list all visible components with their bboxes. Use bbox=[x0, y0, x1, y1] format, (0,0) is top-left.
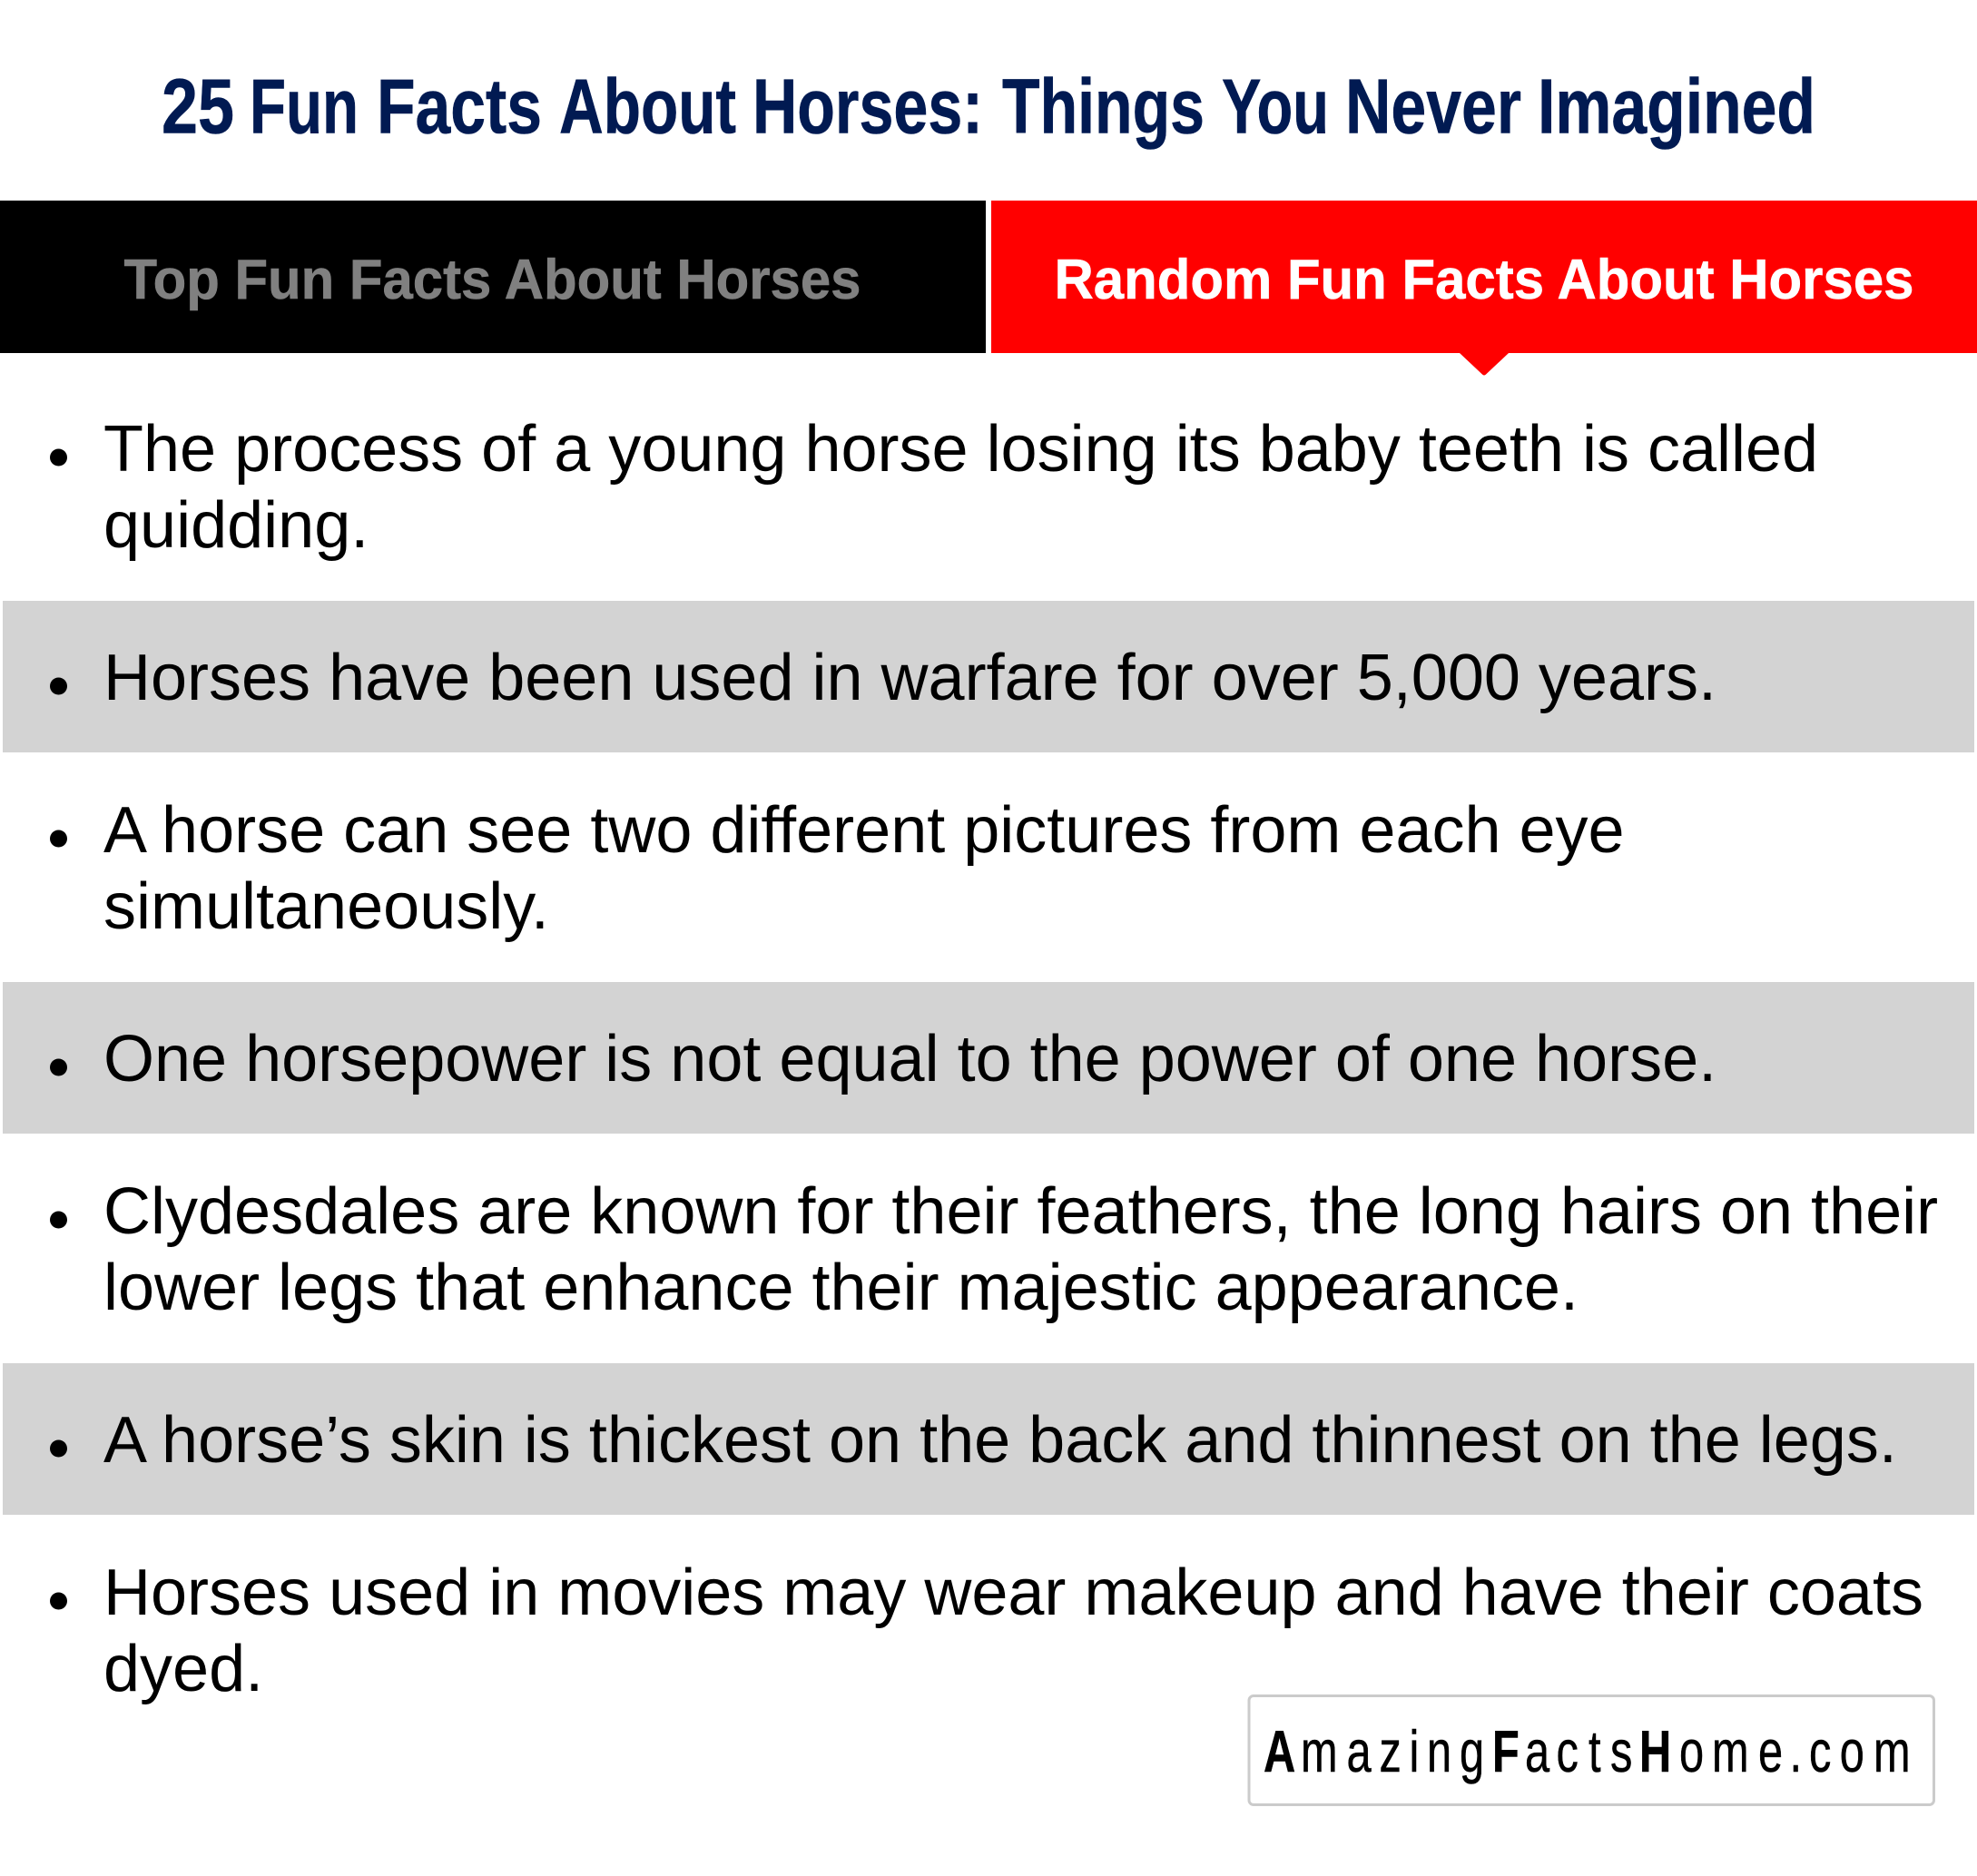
title: Things bbox=[1002, 64, 1205, 151]
fact 4 row bbox=[3, 982, 1974, 1134]
fact 3: simultaneously. bbox=[103, 870, 549, 943]
title: 25 bbox=[162, 64, 234, 151]
tab: top fun facts: Top Fun Facts About Horses bbox=[123, 248, 861, 311]
tab: random fun facts: Random Fun Facts About Horses bbox=[1055, 248, 1913, 311]
fact 6 row bbox=[3, 1363, 1974, 1515]
fact 6 row: A horse’s skin is thickest on the back and thinnest on the legs. bbox=[103, 1404, 1897, 1477]
fact 2 row: Horses have been used in warfare for over 5,000 years. bbox=[103, 642, 1716, 714]
fact 1: quidding. bbox=[103, 489, 369, 562]
title: Facts bbox=[377, 64, 542, 151]
title: About bbox=[559, 64, 736, 151]
title bbox=[162, 64, 1815, 151]
fact 1 bbox=[50, 413, 1818, 562]
fact 1: The process of a young horse losing its baby teeth is called bbox=[103, 413, 1818, 486]
title: Fun bbox=[250, 64, 359, 151]
fact 4 row: One horsepower is not equal to the power of one horse. bbox=[103, 1023, 1716, 1095]
fact 3: A horse can see two different pictures from each eye bbox=[103, 794, 1625, 867]
fact 7 bbox=[50, 1557, 1923, 1705]
logo box bbox=[1249, 1695, 1933, 1804]
title: Never bbox=[1345, 64, 1521, 151]
title: You bbox=[1222, 64, 1329, 151]
fact 5: Clydesdales are known for their feathers, the long hairs on their bbox=[103, 1175, 1938, 1248]
fact 3 bbox=[50, 794, 1625, 943]
title: Imagined bbox=[1538, 64, 1815, 151]
title: Horses: bbox=[752, 64, 983, 151]
fact 7: Horses used in movies may wear makeup and have their coats bbox=[103, 1557, 1923, 1629]
fact 7: dyed. bbox=[103, 1633, 263, 1705]
logo box: AmazingFactsHome.com bbox=[1264, 1719, 1911, 1785]
tab: top fun facts bbox=[0, 201, 986, 353]
tab: random fun facts bbox=[991, 201, 1977, 376]
fact 5 bbox=[50, 1175, 1938, 1324]
fact 2 row bbox=[3, 601, 1974, 752]
fact 5: lower legs that enhance their majestic appearance. bbox=[103, 1252, 1579, 1324]
